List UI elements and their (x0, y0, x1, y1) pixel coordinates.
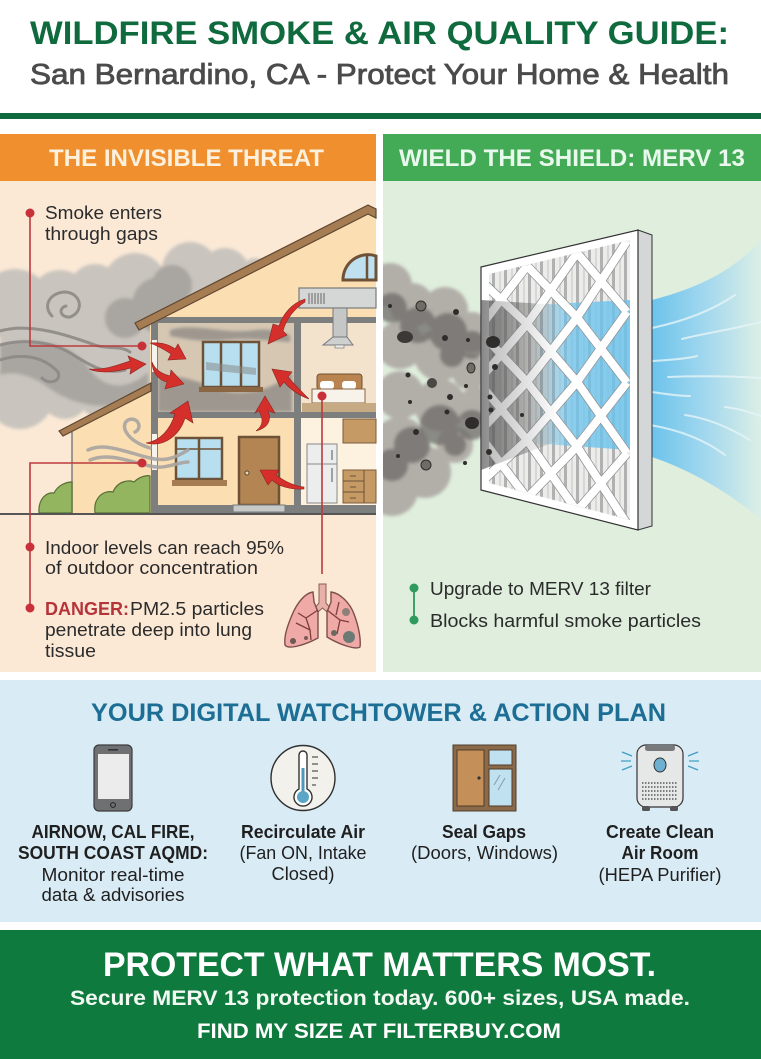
action: monitor data (18, 822, 208, 905)
callout: indoor levels: of outdoor concentration (45, 558, 258, 578)
upper window (199, 342, 263, 392)
benefit bullets: Upgrade to MERV 13 filter (430, 579, 651, 599)
outdoor smoke cloud (0, 242, 267, 429)
panel heading: wield the shield (383, 134, 761, 181)
footer offer: Secure MERV 13 protection today. 600+ sizes, USA made. (70, 987, 690, 1010)
bed (302, 374, 376, 412)
action: monitor data: AIRNOW, CAL FIRE, (32, 822, 194, 842)
action: clean air room: Create Clean (606, 822, 714, 842)
icon: smartphone (94, 745, 132, 811)
panel heading: the invisible threat (0, 134, 376, 181)
main roof (135, 205, 376, 330)
clean air stream (650, 240, 761, 519)
filter frame (478, 230, 652, 530)
panel: the invisible threat (0, 134, 376, 672)
callout: danger: PM2.5 particles (130, 599, 264, 619)
action: monitor data: SOUTH COAST AQMD: (18, 843, 208, 863)
rooms (158, 323, 294, 412)
footer headline: PROTECT WHAT MATTERS MOST. (103, 946, 656, 984)
lean-to roof (59, 383, 151, 436)
small wisp at gap (88, 419, 188, 467)
title block (30, 15, 729, 91)
action: recirculate air (240, 822, 366, 884)
kitchen cabinets and fridge (307, 419, 376, 503)
panel heading: the invisible threat: THE INVISIBLE THREAT (49, 145, 324, 172)
red infiltration arrows (89, 299, 309, 489)
callout: danger: tissue (45, 641, 96, 661)
lean-to wall (72, 388, 152, 513)
section heading: YOUR DIGITAL WATCHTOWER & ACTION PLAN (91, 699, 666, 727)
action: recirculate air: Closed) (272, 864, 334, 884)
callout: indoor levels: Indoor levels can reach 95% (45, 538, 284, 558)
action: monitor data: Monitor real-time (42, 865, 184, 885)
smoke cloud hitting filter (383, 262, 480, 518)
ventilation duct (299, 288, 376, 348)
callout: danger: DANGER: (45, 599, 129, 619)
action: recirculate air: (Fan ON, Intake (240, 843, 366, 863)
ground line (0, 513, 376, 515)
icon: lungs (285, 584, 360, 648)
structural walls (151, 317, 376, 513)
lower window (172, 438, 227, 486)
trapped smoke particles (388, 301, 524, 470)
icon: air purifier (621, 745, 699, 811)
benefit bullets: Blocks harmful smoke particles (430, 611, 701, 631)
footer link: FIND MY SIZE AT FILTERBUY.COM (197, 1020, 561, 1043)
main title: WILDFIRE SMOKE & AIR QUALITY GUIDE: (30, 15, 729, 51)
icon: door and window (453, 745, 516, 811)
action: clean air room: Air Room (622, 843, 698, 863)
action: seal gaps: Seal Gaps (442, 822, 526, 842)
house (39, 205, 376, 513)
panel heading: wield the shield: WIELD THE SHIELD: MERV 13 (399, 145, 745, 172)
action: recirculate air: Recirculate Air (241, 822, 365, 842)
indoor smoke (158, 327, 292, 412)
footer call to action (0, 930, 761, 1059)
benefit bullets (410, 579, 701, 631)
door (233, 437, 285, 512)
panel: digital watchtower and action plan (0, 680, 761, 922)
callout connector lines (30, 213, 322, 608)
bushes (39, 482, 72, 513)
callout: danger: penetrate deep into lung (45, 620, 252, 640)
air passing through media (530, 300, 630, 450)
callout: smoke enters: through gaps (45, 224, 158, 244)
panel: wield the shield (366, 134, 761, 672)
action: clean air room: (HEPA Purifier) (598, 865, 722, 885)
action: clean air room (598, 822, 722, 885)
attic window (343, 255, 376, 280)
filter lattice (478, 241, 627, 524)
action: seal gaps (411, 822, 558, 863)
gable wall (150, 208, 376, 513)
icon: thermometer (271, 746, 335, 810)
callout: smoke enters: Smoke enters (45, 203, 162, 223)
subtitle: San Bernardino, CA - Protect Your Home & Health (30, 59, 729, 91)
action: seal gaps: (Doors, Windows) (411, 843, 558, 863)
action: monitor data: data & advisories (42, 885, 184, 905)
